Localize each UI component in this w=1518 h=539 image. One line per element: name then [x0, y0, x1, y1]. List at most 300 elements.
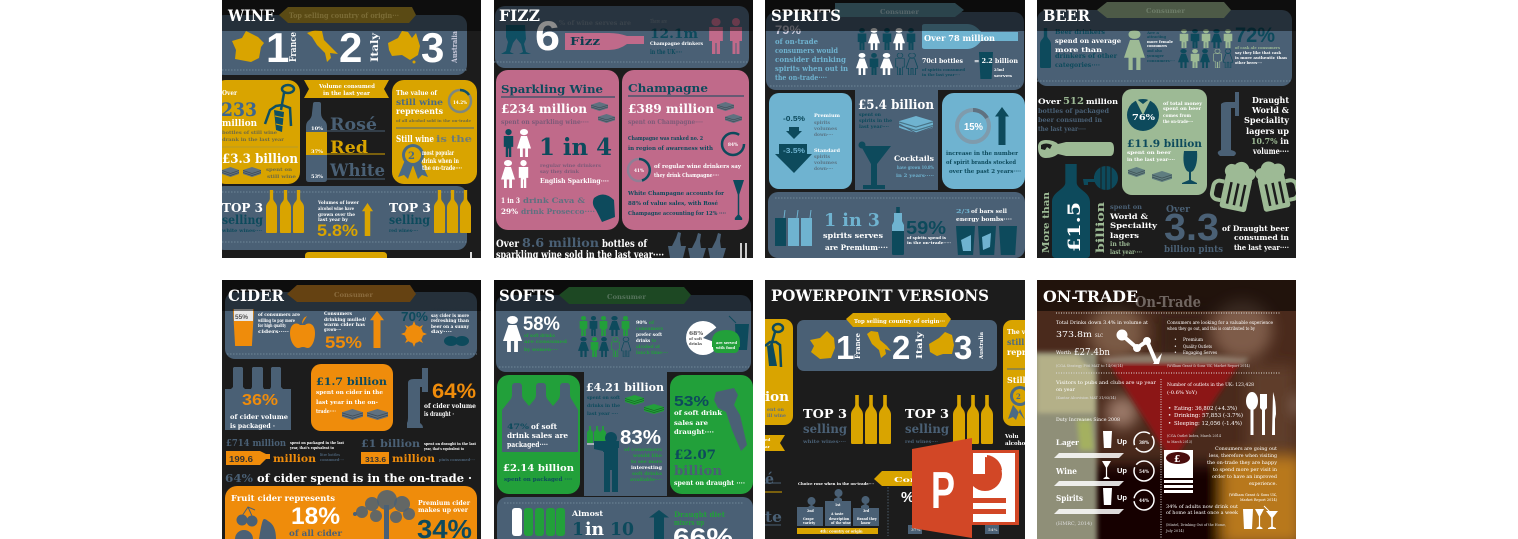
icon: crate packaged: 36%	[242, 392, 278, 409]
panel: centre spend: have grown 10.8%	[897, 165, 934, 171]
text: female consumers: Are a	[1146, 30, 1160, 35]
panel: draught: 53%	[674, 393, 709, 410]
panel: centre spend: spirits in the	[859, 118, 892, 124]
text: beer drinkers spend: drinkers of other	[1055, 52, 1118, 60]
icon: people grid	[856, 28, 918, 75]
heading: On-Trade	[1135, 293, 1201, 311]
banner: consumer: Consumer	[607, 293, 647, 301]
panel: sparkling wine: say they drink	[540, 169, 580, 175]
text: 90 percent: drinks to	[636, 338, 656, 344]
text: beer drinkers spend: categories····	[1055, 61, 1100, 69]
panel: sage money: in the last year····	[1127, 157, 1175, 163]
panel: origin rankings	[797, 313, 997, 371]
panel: fizz: % of wine serves are	[559, 20, 631, 27]
text: total drinks: 373.8m	[1056, 330, 1092, 340]
text: 90 percent: consumers	[636, 326, 663, 332]
text: female consumers: consumers····	[1147, 58, 1176, 63]
panel: gold still wine: of all alcohol sold in the on-trade	[396, 118, 471, 123]
text: more than billion: billion	[1094, 202, 1107, 253]
panel: brands stocked: 15%	[964, 122, 983, 133]
stat: 58 percent: 58%	[523, 314, 560, 335]
panel: origin rankings: Australia	[979, 332, 985, 360]
icon: sun	[401, 321, 427, 347]
panel: brands stocked: over the past 2 years····	[949, 169, 1021, 175]
panel: volumes down	[769, 93, 852, 189]
text: bottles equal serves: = 2.2 billion	[974, 57, 1018, 65]
banner: consumer	[874, 471, 965, 486]
panel: powerpoint versions	[765, 280, 1027, 539]
panel: gold still wine: 2	[408, 151, 415, 162]
text: female consumers	[1146, 30, 1176, 63]
panel: almost 1 in 10	[497, 497, 753, 539]
panel: sparkling wine: 1 in 3	[501, 196, 520, 205]
chart: bottle volume shares	[306, 102, 385, 182]
background photo	[1032, 280, 1302, 539]
heading: ON-TRADE	[1043, 287, 1138, 306]
icon: large bottle: £1.5	[1065, 202, 1085, 252]
stat: six percent: 6	[535, 12, 560, 59]
panel: fruit cider: 18%	[291, 503, 340, 530]
panel: volumes down: -0.5%	[783, 114, 805, 123]
chart: podium: 2nd	[807, 509, 815, 513]
chart: podium: Brand they	[857, 517, 877, 521]
text: volumes right: alcoho	[1005, 441, 1026, 447]
panel: gold left	[755, 319, 793, 425]
banner: consumer: Cons	[894, 476, 925, 484]
text: 79 percent	[775, 23, 848, 82]
icon: pint	[233, 309, 254, 346]
text: outlets: Sleeping: 12,056 (-1.4%)	[1174, 420, 1242, 427]
panel: centre spend: spent on soft	[587, 395, 621, 401]
panel: top 3 white	[802, 395, 891, 445]
icon: crate packaged: of cider volume	[230, 414, 288, 421]
banner: consumer: Consumer	[880, 8, 920, 16]
panel: gold right	[1003, 320, 1033, 426]
panel: gold right: still	[1007, 337, 1024, 347]
stat: draught spend: pints consumed····	[439, 458, 475, 462]
banner: consumer: Consumer	[334, 291, 374, 299]
panel: centre spend: of consumers	[624, 447, 663, 452]
chart: podium: 4th: country or origin	[820, 530, 863, 534]
panel: top 3: white wines····	[221, 228, 262, 234]
panel: beer	[1037, 0, 1296, 258]
fragment: left banner: te	[765, 508, 782, 526]
panel: premium serves: energy bombs····	[956, 217, 1012, 223]
panel: sparkling wine: 29%	[501, 207, 518, 216]
text: visitors: (Kantar Alcovision MAT 31/03/14)	[1056, 396, 1117, 400]
icon: long bottle: Over 78 million	[924, 34, 995, 44]
stat: champagne drinkers: in the UK····	[650, 49, 682, 56]
stat: 3.3 billion pints	[1164, 205, 1290, 255]
panel: gold still wine: the on-trade····	[422, 165, 462, 172]
icon: tap	[407, 368, 428, 428]
panel: sage money: of total money	[1163, 101, 1202, 107]
panel: volumes down: volumes	[813, 126, 837, 132]
panel: brands stocked	[942, 93, 1025, 189]
text: volumes right: Volu	[1004, 434, 1019, 440]
icon: woman	[1124, 30, 1145, 70]
stat: draught spend: spent on draught in the last	[424, 442, 476, 446]
text: 79 percent: consider drinking	[775, 55, 846, 64]
fragment: percentage: 37%	[911, 527, 921, 532]
text: consumers experience: Quality Outlets	[1183, 344, 1212, 350]
text: 512 million bottles: bottles of packaged	[1038, 107, 1109, 115]
divider	[222, 69, 467, 71]
panel: champagne: 88% of value sales, with Rosé	[628, 200, 718, 207]
stat: champagne drinkers: Champagne drinkers	[650, 41, 703, 47]
panel: fruit cider: Fruit cider represents	[231, 493, 336, 503]
panel: champagne: of regular wine drinkers say	[654, 164, 742, 170]
panel: volumes down: Standard	[814, 148, 840, 154]
text: consumers experience: when they go out, and this is contributed to by	[1167, 326, 1255, 332]
panel: centre spend: drinks in the	[587, 403, 620, 409]
fragment: percentage: %	[901, 489, 914, 506]
panel: champagne: Champagne	[628, 81, 708, 95]
panel: cider	[222, 280, 481, 539]
chart: podium: A taste	[830, 512, 843, 516]
icon: receipt: £	[1174, 455, 1180, 465]
panel: packaged: spent on packaged ····	[504, 477, 572, 483]
text: 512 million bottles	[1038, 97, 1119, 133]
fragment: left banner: ar	[765, 444, 771, 449]
text: total drinks: Worth	[1056, 350, 1071, 356]
stat: draught spend: year, that's equivalent to	[423, 447, 465, 451]
icon: pie and burger: 68%	[689, 331, 704, 337]
icon: apple	[290, 316, 315, 348]
panel: premium serves: 1 in 3	[824, 210, 880, 231]
text: 512 million bottles: 512	[1063, 97, 1084, 107]
text: consumers experience	[1167, 320, 1273, 368]
heading: CIDER	[228, 286, 285, 305]
panel: sparkling wine: drink Cava &	[523, 196, 585, 205]
text: consumers experience: •	[1174, 345, 1177, 350]
icon: pint: 55%	[235, 314, 248, 321]
stat: 64 percent draught: 64%	[432, 380, 476, 403]
text: 90 percent: prefer soft	[636, 332, 663, 338]
panel: centre spend: last year ····	[587, 411, 618, 417]
text: female consumers: attracting	[1147, 34, 1166, 39]
text: outlets: (-0.6% YoY)	[1167, 389, 1197, 396]
panel: gold volume: £3.3 billion	[222, 152, 298, 167]
chart: podium: Grape	[803, 517, 814, 521]
stat: packaged spend: consumed····	[320, 458, 344, 462]
text: outlets: Drinking: 57,853 (-3.7%)	[1174, 412, 1243, 419]
text: 512 million bottles: beer consumed in	[1038, 116, 1102, 124]
text: world lagers: lagers	[1110, 231, 1139, 240]
panel: spirits	[765, 0, 1025, 258]
text: 70 percent	[401, 307, 470, 335]
stat: 58 percent: are consumed	[524, 339, 568, 345]
heading	[1043, 287, 1201, 311]
panel: packaged: drink sales are	[507, 431, 569, 440]
panel: gold left: ion	[765, 390, 790, 405]
text: on-trade spend: of cider spend is in the on-trade ·	[257, 472, 472, 485]
panel: champagne: 41%	[634, 168, 645, 174]
panel: champagne	[622, 70, 749, 230]
panel: gold volume	[214, 80, 300, 184]
text: outlets: (CGA Outlet Index, March 2014	[1167, 434, 1222, 438]
panel: volumes down: down····	[814, 166, 833, 172]
panel: top 3: selling	[222, 213, 264, 227]
panel: origin rankings: Top selling country of origin···	[854, 319, 945, 325]
icon: crate packaged: is packaged ·	[230, 423, 275, 430]
panel: cider spend: £1.7 billion	[316, 376, 387, 388]
text: more than billion	[1041, 192, 1107, 253]
stat: 3.3 billion pints: billion pints	[1164, 245, 1223, 255]
text: going out less: (William Grant & Sons UK,	[1229, 492, 1277, 497]
text: female consumers: more female	[1147, 39, 1174, 44]
panel: premium serves: are Premium····	[825, 243, 888, 252]
stat: 64 percent draught: is draught ·	[424, 411, 454, 418]
panel: centre spend: £5.4 billion	[858, 98, 934, 113]
ranking numbers	[266, 24, 459, 71]
icon: pie and burger: drinks	[689, 341, 702, 346]
chart: bottle volume shares: 37%	[311, 149, 323, 155]
stat: packaged spend: year, that's equivalent to	[289, 446, 335, 450]
icon: tree	[353, 490, 415, 539]
icon: fizz bottle: Fizz	[570, 35, 600, 48]
text: world lagers: World &	[1109, 212, 1148, 221]
panel: cider spend	[311, 364, 393, 431]
panel: origin rankings: Italy	[914, 332, 924, 359]
panel: top 3: Volumes of lower	[317, 200, 360, 206]
icon: pie and burger: are served	[716, 340, 737, 345]
panel: gold right: Still	[1007, 375, 1026, 385]
banner: volume: in the last year	[323, 91, 370, 97]
text: bottles equal serves	[922, 52, 1018, 79]
panel: gold still wine: is the	[436, 135, 472, 145]
icon: people grid	[578, 316, 631, 357]
text: visitors: on year	[1056, 387, 1076, 393]
stat: draught spend: million	[392, 454, 436, 465]
text: draught lagers: volume····	[1252, 146, 1289, 156]
panel: fruit cider	[225, 486, 477, 539]
panel: top 3 red: TOP 3	[905, 407, 949, 421]
text: 79 percent: 79%	[775, 23, 801, 37]
panel: champagne: Champagne accounting for 12% ····	[628, 211, 726, 217]
panel: packaged: £2.14 billion	[503, 463, 574, 474]
panel: sage money: 76%	[1132, 112, 1155, 122]
panel: top 3 red: red wines····	[905, 439, 938, 445]
panel: sage money: £11.9 billion	[1127, 138, 1202, 150]
text: 55 percent consumers	[257, 312, 300, 335]
panel: top 3 red	[905, 395, 993, 445]
panel: gold still wine: represents	[396, 106, 443, 116]
panel: gold volume: million	[222, 119, 257, 129]
chart: podium: know	[861, 521, 871, 525]
text: 79 percent: spirits when out in	[775, 64, 848, 73]
panel: volumes down: volumes	[813, 160, 837, 166]
text: 79 percent: consumers would	[775, 46, 838, 55]
text: world lagers	[1109, 204, 1158, 256]
panel: fruit cider: Premium cider	[418, 500, 471, 507]
stat: champagne drinkers	[650, 19, 703, 56]
stat: 72 percent	[1235, 24, 1287, 65]
panel: cider spend: trade····	[316, 409, 336, 415]
panel: cider spend: last year in the on-	[316, 400, 378, 406]
text: total drinks	[1056, 320, 1148, 368]
panel: on-trade	[1037, 280, 1296, 539]
panel: top 3: last year by	[318, 217, 348, 223]
panel: almost 1 in 10: Almost	[571, 509, 604, 518]
panel: volumes down: Premium	[814, 113, 841, 119]
stat: packaged spend: 199.6	[229, 454, 253, 464]
text: bottles sold: sparkling wine sold in the last year····	[496, 250, 664, 261]
panel: fruit cider: makes up over	[418, 507, 469, 514]
panel: champagne: spent on Champagne····	[628, 119, 703, 126]
panel: draught: draught····	[674, 429, 714, 436]
panel: top 3 red: selling	[905, 422, 950, 436]
text: outlets: •	[1168, 421, 1171, 427]
text: 55 percent consumers: for high quality	[258, 323, 286, 329]
text: beer drinkers spend: more than	[1055, 46, 1102, 54]
banner: volume	[304, 80, 389, 98]
panel: volumes down: down····	[814, 132, 833, 138]
text: total drinks: Total Drinks down 3.4% in volume at	[1056, 320, 1148, 326]
panel: premium serves: of bars sell	[971, 209, 1007, 215]
text: 70 percent: refreshing than	[431, 318, 470, 324]
text: volumes right	[1004, 434, 1026, 447]
icon: powerpoint logo: P	[931, 462, 955, 520]
heading: BEER	[1043, 6, 1091, 25]
banner: consumer: Consumer	[1146, 7, 1186, 15]
text: outlets: •	[1168, 413, 1171, 419]
text: outlets: •	[1168, 406, 1171, 412]
panel: origin rankings: 1	[836, 329, 854, 366]
text: warm cider: 55%	[325, 333, 362, 352]
panel: draught: billion	[674, 464, 723, 479]
icon: people	[709, 18, 742, 54]
text: 70 percent: of cider drinkers	[431, 307, 469, 313]
panel: gold volume: 233	[221, 99, 257, 121]
ranking numbers: 2	[339, 24, 362, 71]
text: going out less: to spend more per visit in	[1213, 467, 1278, 473]
chart: duty increases: Lager	[1056, 438, 1080, 447]
chart: duty increases: 54%	[1139, 469, 1149, 474]
panel: packaged	[497, 375, 580, 494]
panel: origin rankings: 3	[954, 329, 972, 366]
panel: sparkling wine	[496, 70, 619, 230]
chart: bottle volume shares: Red	[330, 138, 368, 158]
stat: packaged spend: spent on packaged in the last	[290, 441, 344, 445]
icon: ice buckets	[668, 232, 726, 258]
stat: 58 percent: by women····	[524, 347, 558, 353]
chart: duty increases: Wine	[1055, 466, 1077, 476]
panel: top 3: red wines····	[389, 228, 418, 234]
panel: sage money: the on-trade····	[1163, 119, 1193, 125]
stat: 72 percent: is more authentic than	[1235, 55, 1287, 60]
text: beer drinkers spend: Beer drinkers	[1055, 28, 1105, 36]
chart: duty increases	[1054, 431, 1154, 527]
stat: 72 percent: 72%	[1235, 24, 1275, 47]
panel: gold still wine: Still wine	[396, 135, 434, 145]
panel: packaged: of soft	[531, 422, 558, 431]
icon: italy	[307, 30, 338, 62]
stat: champagne drinkers: 12.1m	[650, 27, 698, 42]
heading: WINE	[227, 6, 275, 25]
ranking numbers: Australia	[450, 31, 459, 64]
panel: centre spend: to see more	[631, 459, 662, 464]
panel: centre spend: soft drinks	[632, 471, 663, 476]
panel: premium serves: 2/3	[956, 209, 970, 215]
stat: draught spend	[361, 439, 476, 465]
icon: pie and burger: of soft	[689, 336, 702, 341]
panel: champagne: White Champagne accounts for	[627, 191, 724, 197]
panel: top 3: TOP 3	[222, 201, 263, 215]
panel: almost 1 in 10: mixers up	[674, 518, 704, 527]
text: 70 percent: say cider is more	[431, 313, 469, 319]
panel: sage money	[1122, 89, 1207, 195]
panel: sage money: spent on beer	[1127, 150, 1172, 156]
stat: 3.3 billion pints: Over	[1166, 205, 1190, 215]
text: consumers experience: Premium	[1183, 337, 1203, 343]
icon: waiter with tray	[587, 426, 619, 492]
text: 70 percent: beer on a sunny	[431, 324, 469, 330]
chart: duty increases: (HMRC, 2014)	[1056, 520, 1092, 527]
panel: centre spend: in 2 years·····	[896, 173, 934, 179]
text: adults: (Mintel, Drinking Out of the Home,	[1166, 523, 1226, 527]
panel: volumes down: spirits	[814, 120, 830, 126]
text: world lagers: Speciality	[1110, 221, 1158, 230]
panel: top 3 white: white wines····	[802, 439, 846, 445]
text: 512 million bottles: million	[1086, 97, 1119, 106]
text: 55 percent consumers: ciders·····	[258, 329, 290, 335]
panel: gold still wine: 14.2%	[453, 100, 467, 106]
panel: cider spend: spent on cider in the	[316, 390, 384, 396]
chart: duty increases: Spirits	[1056, 493, 1083, 503]
panel: centre spend	[855, 90, 938, 190]
heading: POWERPOINT VERSIONS	[771, 286, 989, 305]
text: beer drinkers spend: spend on average	[1055, 37, 1121, 45]
panel: gold still wine	[392, 80, 477, 184]
text: consumers experience: •	[1174, 351, 1177, 356]
text: total drinks: (CGA Strategy P06 MAT to 14/06/14)	[1056, 364, 1124, 368]
chart: podium: 3rd	[863, 509, 870, 513]
text: total drinks: £27.4bn	[1074, 348, 1110, 358]
panel: gold right: 2	[1016, 392, 1021, 401]
panel: centre spend: last year····	[859, 124, 889, 130]
panel: packaged: 47%	[507, 422, 529, 431]
text: 90 percent: 90% of	[636, 320, 655, 326]
icon: beer mugs	[1209, 157, 1301, 213]
stat: packaged spend	[226, 439, 344, 465]
panel: sparkling wine: £234 million	[501, 101, 587, 116]
chart: bottle volume shares: Rosé	[330, 115, 377, 135]
icon: keg	[1083, 166, 1118, 190]
text: 55 percent consumers: willing to pay more	[257, 318, 295, 324]
stat: 3.3 billion pints: consumed in	[1234, 233, 1290, 242]
text: going out less: Consumers are going out	[1215, 446, 1277, 452]
text: beer drinkers spend	[1055, 28, 1121, 69]
panel: origin rankings: 2	[892, 329, 910, 366]
panel: top 3	[214, 186, 471, 250]
icon: bottle opener	[1038, 140, 1114, 158]
text: consumers experience: (William Grant & Sons UK, Market Report 2014)	[1167, 364, 1251, 368]
chart: podium: description	[829, 517, 850, 521]
chart: bottle volume shares: White	[329, 161, 385, 181]
chart: podium	[797, 481, 879, 534]
panel: packaged: packaged····	[507, 440, 548, 449]
text: adults: of home at least once a week	[1166, 510, 1239, 516]
stat: packaged spend: litre bottles	[320, 453, 340, 457]
panel: gold still wine: The value of	[396, 90, 437, 97]
chart: podium: of the wine	[831, 521, 851, 525]
text: 55 percent consumers: of consumers are	[258, 312, 300, 318]
text: adults: July 2014)	[1165, 529, 1185, 533]
panel: champagne: Champagne was ranked no. 2	[628, 136, 703, 142]
heading: SPIRITS	[771, 6, 841, 25]
text: going out less: Market Report 2014)	[1240, 497, 1277, 502]
